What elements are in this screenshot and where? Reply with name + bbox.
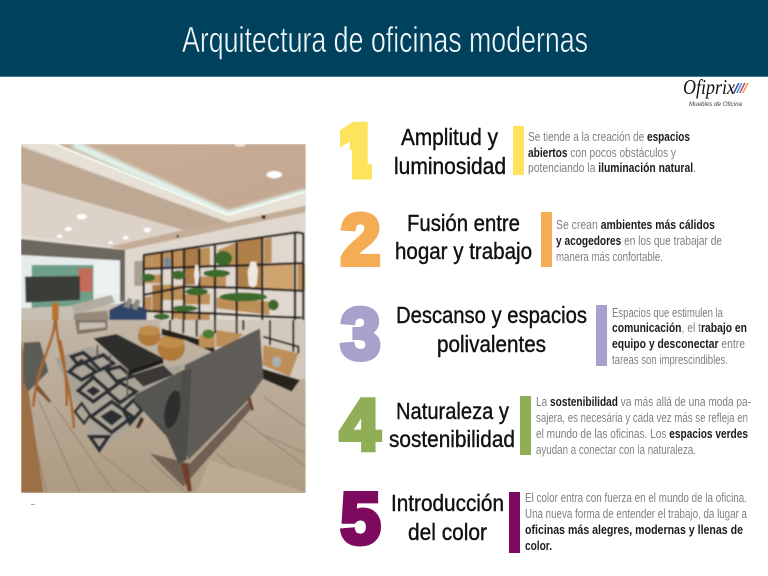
floor lamp shade	[25, 276, 80, 303]
lamp legs	[33, 320, 74, 428]
body text 2: manera más confortable.	[556, 250, 663, 264]
panel: item 2	[340, 200, 722, 280]
logo: Ofiprix: Muebles de Oficina	[689, 101, 742, 108]
heading 2: hogar y trabajo	[395, 238, 532, 264]
window	[21, 255, 120, 308]
floor planks	[30, 397, 306, 493]
beige armchair	[74, 310, 110, 321]
body text 4	[536, 395, 751, 457]
wall and back shelf base	[159, 319, 306, 380]
lower part of the photo: floor, rug, table, sofa	[21, 320, 306, 493]
panel: item 4	[340, 386, 751, 466]
title: Arquitectura de oficinas modernas	[182, 19, 588, 60]
rug	[55, 347, 187, 452]
body text 2	[556, 218, 722, 264]
body text 4: el mundo de las oficinas. Los espacios verdes	[536, 427, 748, 441]
body text 3: comunicación, el trabajo en	[612, 321, 747, 335]
heading 1	[394, 124, 506, 179]
number 4: 4	[340, 386, 380, 466]
shelves: black frame	[143, 232, 304, 330]
heading 5	[391, 490, 504, 545]
body text 5	[525, 491, 747, 553]
vases	[248, 262, 258, 287]
number 3: 3	[340, 294, 381, 374]
dark band	[21, 239, 125, 302]
shelf lower part	[162, 328, 215, 353]
grey sofa	[178, 328, 263, 460]
heading 3: Descanso y espacios	[396, 302, 587, 328]
body text 1: Se tiende a la creación de espacios	[528, 130, 690, 144]
number 2: 2	[340, 200, 381, 280]
body text 5: color.	[525, 539, 552, 553]
body text 3: Espacios que estimulen la	[612, 306, 723, 320]
number 5: 5	[340, 480, 381, 560]
color bar 3	[596, 305, 607, 366]
color bar 1	[513, 126, 524, 175]
color bar 5	[509, 492, 520, 553]
body text 3	[612, 306, 747, 367]
body text 2: Se crean ambientes más cálidos	[556, 218, 715, 232]
body text 4: ayudan a conectar con la naturaleza.	[536, 443, 696, 457]
upper part of the photo: ceiling, wall and shelving	[21, 143, 306, 331]
heading 1: luminosidad	[394, 153, 506, 179]
panel: item 5	[340, 480, 747, 560]
body text 2: y acogedores en los que trabajar de	[556, 234, 722, 248]
color bar 4	[520, 396, 531, 455]
body text 3: tareas son imprescindibles.	[612, 353, 728, 367]
heading 4: sostenibilidad	[389, 426, 515, 452]
picture	[134, 261, 144, 286]
plants	[142, 251, 279, 320]
wood panel	[21, 338, 43, 492]
logo: Ofiprix	[683, 75, 749, 108]
number 1: 1	[337, 112, 377, 192]
shelves: wood boxes	[144, 238, 305, 330]
heading 4	[389, 398, 515, 452]
floor far	[21, 303, 122, 321]
logo: Ofiprix: Ofiprix	[683, 75, 736, 99]
panel: item 1	[340, 122, 696, 180]
ottomans	[137, 332, 162, 347]
sofa shadow	[150, 400, 253, 487]
heading 2	[395, 210, 532, 264]
lights	[267, 171, 282, 178]
back chairs	[72, 295, 115, 314]
coffee table	[93, 334, 163, 370]
header band	[0, 0, 768, 77]
body text 1: potenciando la iluminación natural.	[528, 161, 696, 175]
body text 1	[528, 130, 696, 175]
body text 1: abiertos con pocos obstáculos y	[528, 146, 677, 160]
heading 2: Fusión entre	[407, 210, 520, 236]
back wall	[124, 261, 306, 320]
body text 3: equipo y desconectar entre	[612, 337, 745, 351]
heading 1: Amplitud y	[401, 124, 498, 150]
beige chair far	[75, 320, 107, 334]
blue sofa	[109, 302, 147, 323]
tiny photo credit mark	[31, 504, 35, 505]
heading 5: Introducción	[391, 490, 504, 516]
photo: modern office lounge	[21, 143, 306, 493]
heading 5: del color	[408, 519, 487, 545]
color bar 2	[541, 212, 552, 267]
panel: item 3	[340, 294, 747, 374]
heading 4: Naturaleza y	[396, 398, 509, 424]
heading 3: polivalentes	[437, 331, 546, 357]
side chair	[23, 342, 48, 392]
heading 3	[396, 302, 587, 357]
